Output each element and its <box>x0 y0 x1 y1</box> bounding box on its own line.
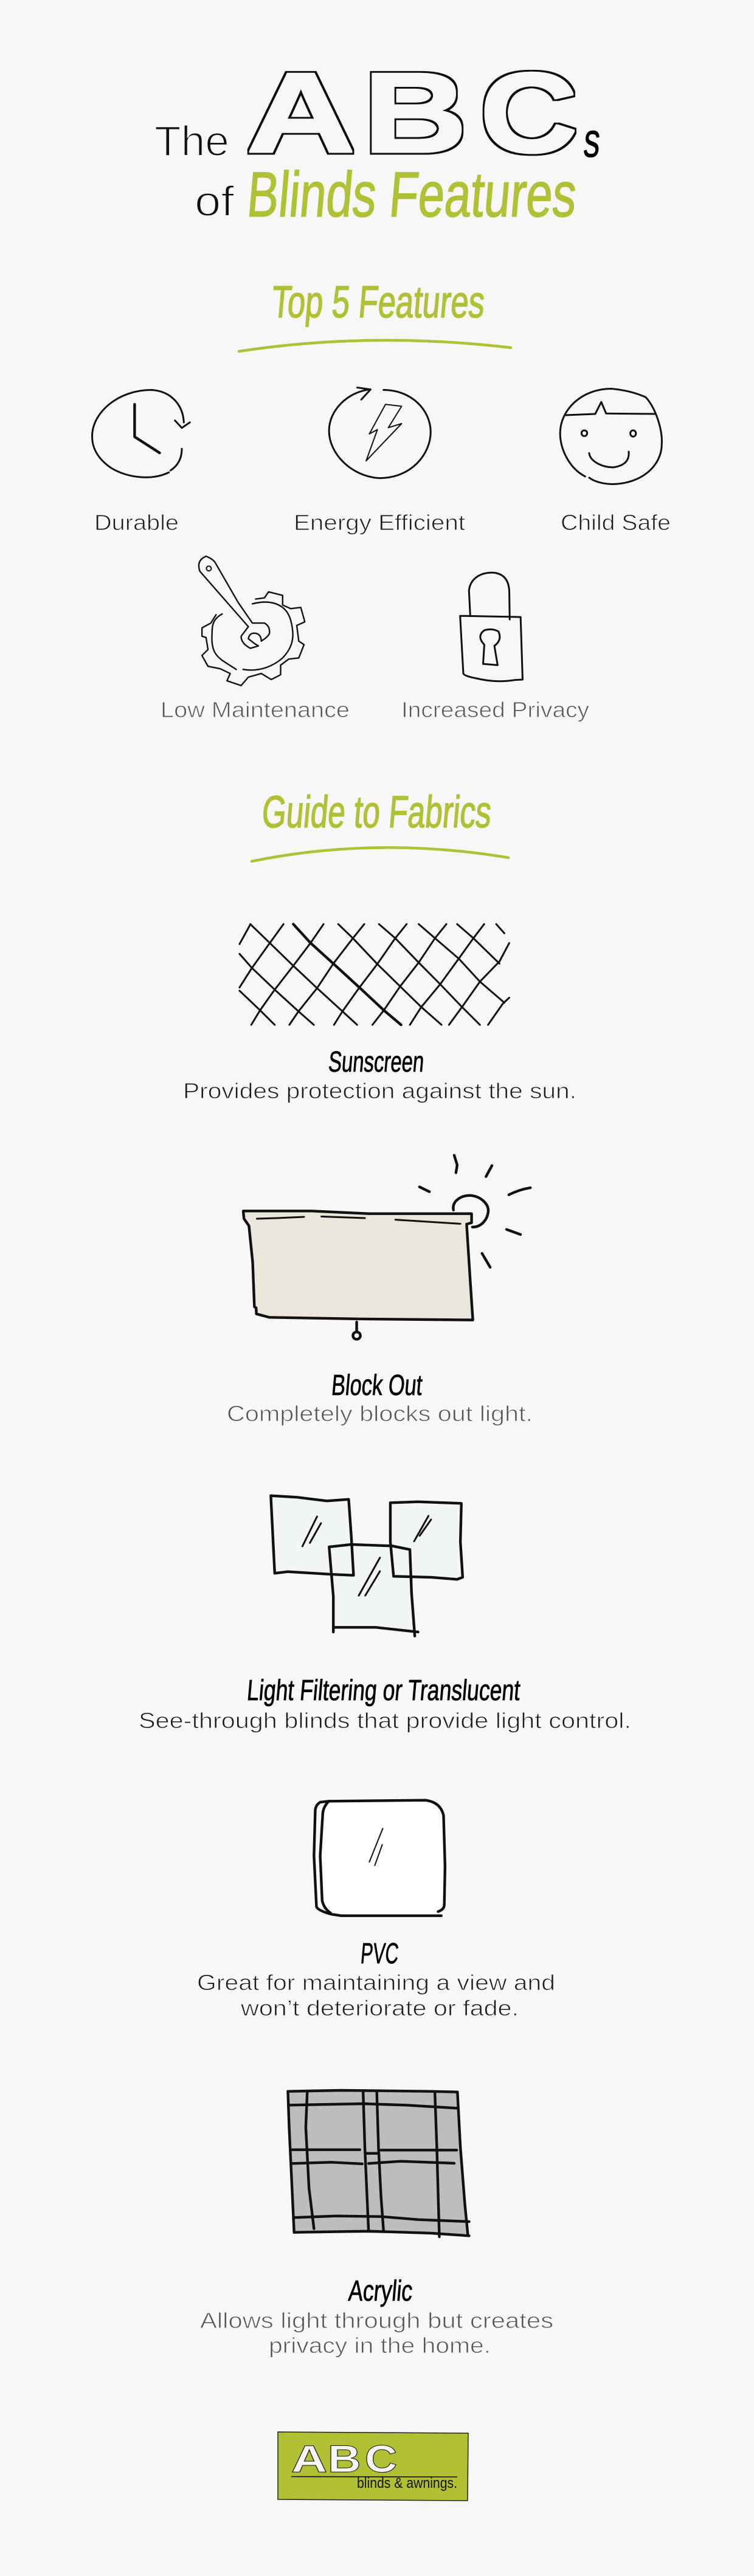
icon: sunscreen mesh <box>240 924 509 1025</box>
fabric: Acrylic <box>200 2090 553 2358</box>
fabric: Acrylic: privacy in the home. <box>269 2333 491 2358</box>
logo: ABC blinds & awnings: blinds & awnings. <box>357 2475 457 2492</box>
fabric: Block Out: Block Out <box>330 1369 424 1402</box>
feature: Low Maintenance: Low Maintenance <box>161 697 350 722</box>
section heading: Guide to Fabrics <box>252 787 508 861</box>
icon: PVC sheet <box>314 1800 445 1916</box>
title line: The ABCs: s <box>582 112 603 167</box>
feature: Increased Privacy <box>401 573 589 722</box>
title line: The ABCs: B <box>363 50 468 176</box>
feature: Energy Efficient: Energy Efficient <box>294 510 465 535</box>
section heading: Top 5 Features: Top 5 Features <box>270 277 487 327</box>
icon: overlapping translucent panes <box>271 1496 463 1636</box>
fabric: Acrylic: Allows light through but creates <box>200 2308 553 2333</box>
title line: The ABCs: The <box>154 117 229 165</box>
fabric: Block Out <box>227 1155 533 1426</box>
title line: of Blinds Features <box>195 159 579 230</box>
fabric: Block Out: Completely blocks out light. <box>227 1401 533 1426</box>
feature: Energy Efficient <box>294 388 465 535</box>
icon: grey panelled blind <box>288 2090 469 2237</box>
icon: wrench and gear <box>199 556 305 686</box>
title line: of Blinds Features: Blinds Features <box>244 159 579 230</box>
fabric: PVC <box>197 1800 555 2020</box>
section heading: Top 5 Features <box>239 277 511 351</box>
fabric: Sunscreen: Provides protection against the sun. <box>183 1078 576 1103</box>
feature: Child Safe: Child Safe <box>561 510 671 535</box>
icon: lightning bolt in cycle <box>329 388 431 478</box>
title <box>154 49 603 230</box>
logo: ABC blinds & awnings <box>278 2432 468 2501</box>
fabric: PVC: won’t deteriorate or fade. <box>240 1996 519 2020</box>
fabric: PVC: Great for maintaining a view and <box>197 1970 555 1995</box>
logo: ABC blinds & awnings: C <box>365 2437 397 2481</box>
icon: roller blind with sun <box>243 1155 530 1339</box>
title line: of Blinds Features: of <box>195 177 235 225</box>
fabric: Light Filtering or Translucent: See-through blinds that provide light control. <box>139 1708 631 1733</box>
section heading: Guide to Fabrics: Guide to Fabrics <box>260 787 494 837</box>
icon: padlock <box>460 573 522 681</box>
title line: The ABCs <box>154 49 603 176</box>
fabric: PVC: PVC <box>359 1937 400 1970</box>
feature: Increased Privacy: Increased Privacy <box>401 697 589 722</box>
feature: Durable: Durable <box>94 510 179 535</box>
feature: Child Safe <box>560 389 671 535</box>
logo: ABC blinds & awnings: A <box>291 2438 327 2481</box>
fabric: Sunscreen <box>183 924 576 1103</box>
fabric: Light Filtering or Translucent <box>139 1496 631 1733</box>
title line: The ABCs: A <box>246 49 356 176</box>
icon: clock <box>92 390 190 477</box>
fabric: Light Filtering or Translucent: Light Filtering or Translucent <box>246 1674 522 1707</box>
fabric: Acrylic: Acrylic <box>347 2275 414 2307</box>
feature: Low Maintenance <box>161 556 350 722</box>
title line: The ABCs: C <box>480 49 578 176</box>
fabric: Sunscreen: Sunscreen <box>327 1045 426 1078</box>
logo: ABC blinds & awnings: B <box>328 2437 361 2481</box>
feature: Durable <box>92 390 190 535</box>
icon: child face <box>560 389 662 484</box>
